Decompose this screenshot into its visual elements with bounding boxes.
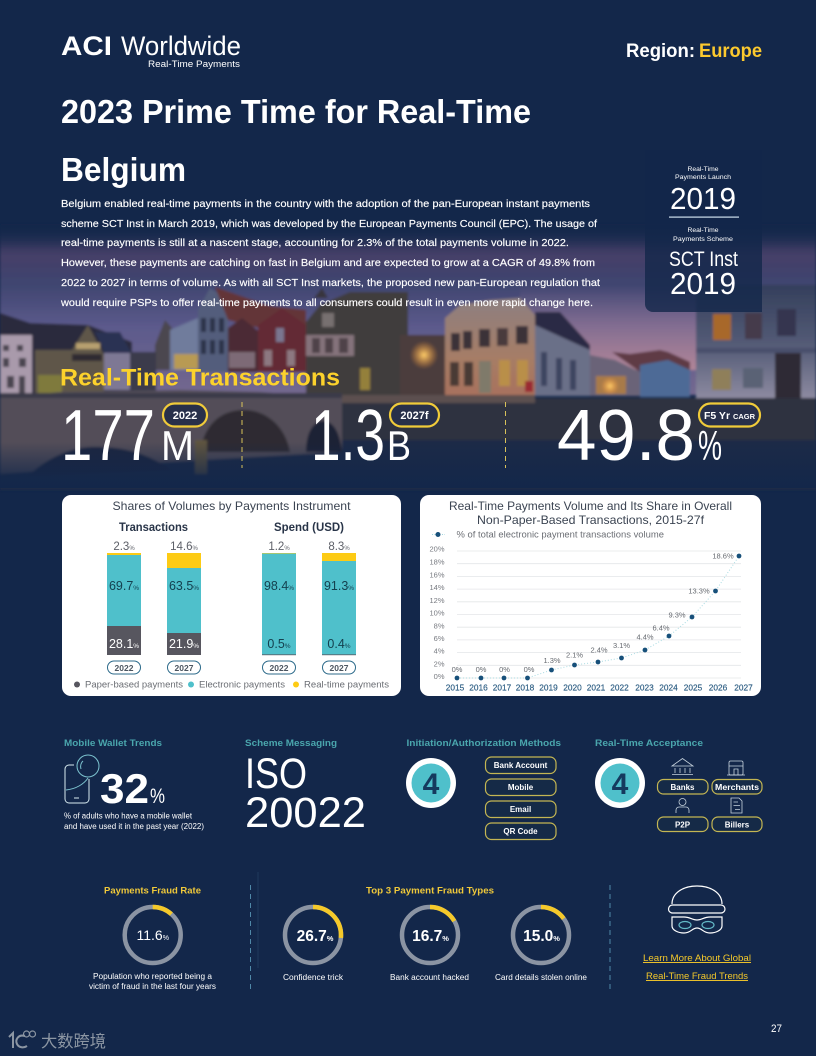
bar: spend 2027 [322,541,356,674]
data labels: 0% [524,665,535,674]
watermark [9,1031,106,1051]
intro paragraph: Belgium enabled real-time payments in the country with the adoption of the pan-European instant payments [61,198,590,210]
bar: spend 2022: 98.4% [264,579,294,593]
region label: Europe [699,41,762,62]
y axis labels: 4% [434,646,445,656]
section: initiation and authorization methods: Bank Account [494,761,548,770]
icon: masked fraudster [668,886,725,933]
data labels [452,552,734,674]
data labels: 9.3% [668,610,686,620]
fraud trends link [643,953,751,982]
icon: person [676,798,689,813]
ring: confidence trick [283,907,344,982]
data labels: 0% [476,665,487,674]
y axis labels: 8% [434,622,445,630]
y axis labels [429,544,445,681]
heading: Mobile Wallet Trends [64,738,162,749]
x axis labels: 2027 [734,682,753,692]
column heading: transactions: Transactions [119,522,188,534]
chart legend: % of total electronic payment transactions volume [456,530,664,540]
data labels: 0% [452,665,463,674]
icon: phone with magnifier [65,755,99,803]
ring: card details stolen online: 15.0% [523,928,560,945]
panel: launch and scheme: Payments Launch [675,174,731,181]
section: top 3 payment fraud types [283,886,588,982]
right pale building [696,285,816,400]
section: top 3 payment fraud types: Top 3 Payment Fraud Types [366,886,494,896]
panel: launch and scheme [645,150,762,312]
watermark: 大数跨境 [41,1032,106,1051]
chart title: Real-Time Payments Volume and Its Share in Overall [449,499,732,513]
tan lit house [445,298,535,398]
left white house [0,335,32,399]
panel: launch and scheme: Real-Time [688,227,719,234]
title: 2023 Prime Time for Real-Time [61,93,531,130]
section: mobile wallet trends [64,738,204,831]
stat: 32 [100,765,149,812]
section: payments fraud rate [89,886,216,991]
x axis labels: 2018 [516,682,535,692]
bar: transactions 2027: 63.5% [169,579,199,593]
x axis labels: 2025 [684,682,703,692]
intro paragraph: However, these payments are catching on fast in Belgium and are expected to grow at a CAGR of 49.8% from [61,257,595,269]
data labels: 2.1% [566,650,583,660]
logo: ACI Worldwide [61,31,241,69]
section: initiation and authorization methods: QR Code [503,827,538,836]
section: scheme messaging: Scheme Messaging [245,738,337,749]
bar: transactions 2022: 2.3% [113,541,135,553]
x axis labels: 2022 [610,682,629,692]
water [0,440,816,490]
bar: transactions 2022: 2022 [115,663,134,673]
x axis labels: 2024 [659,682,678,692]
bar: transactions 2027: 14.6% [170,541,199,553]
chart title: Non-Paper-Based Transactions, 2015-27f [477,513,705,527]
intro paragraph [60,198,600,309]
count badge [595,758,645,808]
section: real-time acceptance [595,738,762,832]
stat: 177 M 2022: M [161,422,194,469]
section: initiation and authorization methods [406,738,561,840]
section: initiation and authorization methods: Mobile [508,783,534,792]
bar: transactions 2027: 2027 [175,663,194,673]
stat: 49.8 percent CAGR: 49.8 [557,396,695,476]
data labels: 0% [499,665,510,674]
chart title [449,499,732,527]
chart legend: Real-time payments [304,680,390,690]
icon: store [727,761,745,775]
x axis labels [446,682,753,692]
count badge: 4 [612,768,629,801]
intro paragraph: scheme SCT Inst in March 2019, which was developed by the European Payments Council (EPC). The usage of [61,218,597,230]
bar: spend 2022: 1.2% [268,541,290,553]
bar: spend 2027: 91.3% [324,579,354,593]
chart legend [74,680,390,690]
panel: launch and scheme: SCT Inst [669,248,738,271]
data labels: 3.1% [613,641,630,650]
x axis labels: 2019 [539,682,558,692]
section: scheme messaging: ISO [245,750,307,798]
panel: shares of volumes chart [62,495,401,696]
mid grey gables [155,320,172,370]
data labels: 18.6% [712,552,734,560]
section: payments fraud rate: Payments Fraud Rate [104,886,201,896]
y axis labels: 20% [429,544,445,554]
stat: 177 M 2022: 177 [61,396,155,476]
y axis labels: 6% [434,634,445,643]
bar: spend 2027: 8.3% [328,541,350,553]
ground and wall [340,398,816,450]
stat: 1.3 B 2027f: B [387,422,411,469]
ring: bank account hacked: Bank account hacked [390,973,469,982]
page number: 27 [771,1023,782,1035]
panel: launch and scheme: Real-Time [688,166,719,173]
data labels: 6.4% [652,624,670,632]
description: % of adults who have a mobile wallet [64,812,193,820]
bar: spend 2022 [262,541,296,674]
ring: confidence trick: 26.7% [297,928,334,945]
photo fades [0,225,816,249]
x axis labels: 2016 [469,682,488,692]
stat: 177 M 2022: 2022 [173,410,197,422]
logo: ACI Worldwide: ACI [61,31,112,61]
icon: bill [731,798,742,813]
background photo: Bruges canal at dusk [0,225,816,490]
section: mobile wallet trends: % [150,785,165,808]
data line and points [455,554,741,680]
x axis labels: 2015 [446,682,465,692]
panel: real-time volume line chart [420,495,761,696]
y axis labels: 14% [429,583,445,592]
logo: ACI Worldwide: Worldwide [121,31,241,61]
panel: launch and scheme: 2019 [670,266,736,301]
data labels: 1.3% [543,656,561,665]
stat: 49.8 percent CAGR [557,396,760,476]
bar: transactions 2022: 28.1% [109,637,139,651]
panel: launch and scheme: Payments Scheme [673,236,733,243]
fraud trends link: Real-Time Fraud Trends [646,971,748,982]
chart title: Shares of Volumes by Payments Instrument [112,499,351,513]
section: real-time acceptance: Real-Time Acceptance [595,738,703,749]
section: real-time acceptance: P2P [675,820,691,830]
x axis labels: 2017 [493,682,512,692]
data labels: 2.4% [590,646,608,654]
blue roof white house [95,332,131,390]
white-blue terrace [535,312,590,396]
bar: spend 2022: 0.5% [267,637,291,651]
bar: spend 2027: 0.4% [327,637,351,651]
street lamp glow [410,341,438,369]
y axis labels: 12% [429,596,445,605]
ring: 11.6 percent: 11.6% [136,927,169,943]
x axis labels: 2021 [587,682,606,692]
section: real-time acceptance: Banks [670,783,695,792]
left tan gabled house [35,325,104,395]
data labels: 13.3% [688,586,710,596]
region label: Region: [626,41,695,62]
x axis labels: 2020 [563,682,582,692]
country heading: Belgium [61,151,186,188]
bar: transactions 2022 [107,541,141,674]
x axis labels: 2023 [635,682,654,692]
stat: 1.3 B 2027f: 2027f [400,410,429,422]
section: initiation and authorization methods: Email [510,805,531,814]
y axis and grid [457,551,741,678]
method pills [486,757,556,840]
chart legend: Electronic payments [199,680,286,690]
y axis labels: 10% [429,608,445,618]
ring: card details stolen online [495,907,588,982]
icon: bank [672,758,693,774]
section heading: real-time transactions: Real-Time Transactions [60,364,340,392]
section: mobile wallet trends: and have used it in the past year (2022) [64,822,204,831]
section: real-time acceptance: Billers [725,820,750,830]
bar: spend 2022: 2022 [270,663,289,673]
fraud trends link: Learn More About Global [643,953,751,964]
section: real-time acceptance: Merchants [715,783,760,792]
data labels: 4.4% [636,632,654,642]
y axis labels: 18% [429,558,445,566]
ring: bank account hacked [390,907,469,982]
section: scheme messaging [245,738,366,837]
red roof and brick houses [215,287,306,340]
panel: launch and scheme: 2019 [670,181,736,216]
stat: 1.3 B 2027f: 1.3 [311,396,385,476]
ring: confidence trick: Confidence trick [283,973,344,982]
ring: bank account hacked: 16.7% [412,928,449,945]
dark stepped gable house [306,292,408,395]
section: payments fraud rate: victim of fraud in the last four years [89,982,216,991]
section: scheme messaging: 20022 [245,789,366,837]
bar: transactions 2022: 69.7% [109,579,139,593]
lamp house [400,335,446,400]
bar: transactions 2027 [167,541,201,674]
count badge: 4 [423,768,440,801]
ring: card details stolen online: Card details stolen online [495,973,588,982]
x axis labels: 2026 [709,682,728,692]
stone bridge [0,390,342,474]
bar: spend 2027: 2027 [330,663,349,673]
section: initiation and authorization methods: Initiation/Authorization Methods [406,738,561,749]
region label [626,41,762,62]
stat: 49.8 percent CAGR: % [698,422,722,469]
far left dark roof [0,313,132,395]
far houses [590,355,640,396]
bar: transactions 2027: 21.9% [169,637,199,651]
y axis labels: 16% [429,570,445,580]
description: Population who reported being a [93,972,213,981]
intro paragraph: 2022 to 2027 in terms of volume. As with all SCT Inst markets, the proposed new pan-European regulation that [61,277,600,289]
count badge [406,758,456,808]
acceptance pills [658,780,762,832]
tall blue house [198,288,228,372]
column heading: spend: Spend (USD) [274,522,344,534]
intro paragraph: real-time payments is still at a nascent stage, accounting for 2.3% of the total payments volume in 2022. [61,237,569,249]
intro paragraph: would require PSPs to offer real-time payments to all consumers could result in even more rapid change here. [60,297,593,309]
stat: 49.8 percent CAGR: F5 Yr CAGR [704,410,756,422]
y axis labels: 0% [434,672,445,681]
chart legend: Paper-based payments [85,680,184,690]
logo: ACI Worldwide: Real-Time Payments [148,59,241,69]
y axis labels: 2% [434,660,445,668]
